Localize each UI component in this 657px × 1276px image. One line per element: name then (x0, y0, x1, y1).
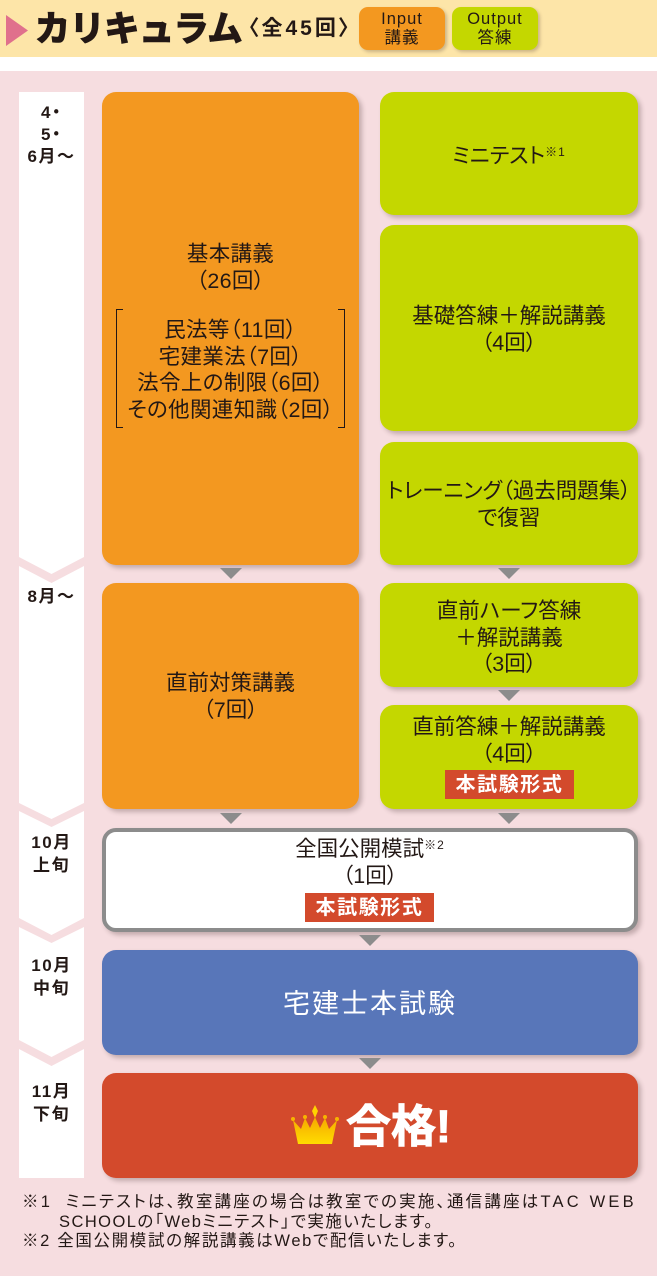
panel: final practice: 直前答練＋解説講義 (412, 715, 606, 739)
panel: half practice: 直前ハーフ答練 (437, 599, 581, 623)
arrow (498, 690, 520, 701)
panel: final lectures (102, 583, 359, 809)
panel: final lectures: 直前対策講義 (166, 671, 295, 695)
panel: final practice: （4回） (482, 742, 536, 766)
arrow (220, 568, 242, 579)
arrow (498, 813, 520, 824)
date: April to June: 5・ (41, 125, 62, 144)
title: カリキュラム (35, 10, 242, 49)
header band (0, 0, 657, 57)
session count: 〈全45回〉 (248, 17, 352, 40)
legend: output: Output (467, 10, 523, 28)
arrow (359, 935, 381, 946)
legend: input (359, 7, 445, 50)
panel: pass (102, 1073, 638, 1178)
date: April to June: 4・ (41, 103, 62, 122)
bracket right (338, 309, 345, 428)
date: early October: 10月 (31, 833, 72, 852)
list: subjects: 民法等（11回） (164, 318, 297, 342)
date: late November: 下旬 (33, 1105, 70, 1124)
panel: half practice: （3回） (482, 652, 536, 676)
arrow (359, 1058, 381, 1069)
date: August: 8月～ (28, 587, 75, 606)
list: subjects: その他関連知識（2回） (127, 398, 334, 422)
panel: half practice: ＋解説講義 (455, 626, 563, 650)
footnote 2: ※2 全国公開模試の解説講義はWebで配信いたします。 (22, 1232, 458, 1250)
footnote 1 continued: SCHOOLの「Webミニテスト」で実施いたします。 (59, 1213, 434, 1231)
list: subjects: 宅建業法（7回） (159, 345, 302, 369)
date: April to June: 6月～ (28, 147, 75, 166)
panel: foundation practice: 基礎答練＋解説講義 (412, 304, 606, 328)
panel: training (380, 442, 638, 565)
panel: national mock exam: 全国公開模試※2 (295, 837, 445, 861)
panel: national mock exam (102, 828, 638, 932)
date: late November (32, 1082, 71, 1124)
pass text: 合格! (346, 1101, 451, 1152)
date: mid October: 10月 (31, 956, 72, 975)
list: subjects: 法令上の制限（6回） (137, 371, 324, 395)
icon: crown (291, 1105, 339, 1144)
panel: final practice (380, 705, 638, 809)
panel: real exam: 宅建士本試験 (283, 989, 457, 1019)
panel: training: トレーニング（過去問題集） (387, 479, 631, 503)
list: subjects (127, 318, 334, 422)
legend: input: 講義 (384, 29, 420, 47)
heading: basic lectures: 基本講義 (187, 242, 274, 266)
legend: output: 答練 (478, 29, 512, 47)
date: early October (31, 833, 72, 875)
legend: input: Input (381, 10, 423, 28)
heading: basic lectures: （26回） (196, 268, 265, 292)
panel: mini test (380, 92, 638, 215)
date: mid October (31, 956, 72, 998)
icon: header triangle (6, 15, 28, 46)
panel: half practice (380, 583, 638, 687)
timeline column (19, 92, 84, 1178)
date: early October: 上旬 (33, 856, 70, 875)
panel: basic lectures (102, 92, 359, 565)
panel: real exam (102, 950, 638, 1055)
date: mid October: 中旬 (33, 979, 70, 998)
panel: mini test: ミニテスト※1 (452, 144, 566, 168)
bracket left (116, 309, 123, 428)
panel: foundation practice: （4回） (482, 330, 536, 354)
panel: foundation practice (380, 225, 638, 431)
arrow (220, 813, 242, 824)
badge: exam format (305, 893, 434, 922)
arrow (498, 568, 520, 579)
panel: training: で復習 (478, 506, 540, 530)
badge: exam format: 本試験形式 (456, 774, 564, 796)
date: April to June (28, 103, 75, 166)
panel: final lectures: （7回） (203, 698, 258, 722)
date: late November: 11月 (32, 1082, 71, 1101)
panel: national mock exam: （1回） (343, 864, 397, 888)
badge: exam format (445, 770, 574, 799)
legend: output (452, 7, 538, 50)
footnote 1: ※1 ミニテストは、教室講座の場合は教室での実施、通信講座はTAC WEB (22, 1193, 637, 1211)
badge: exam format: 本試験形式 (316, 897, 424, 919)
heading: basic lectures (187, 242, 274, 292)
